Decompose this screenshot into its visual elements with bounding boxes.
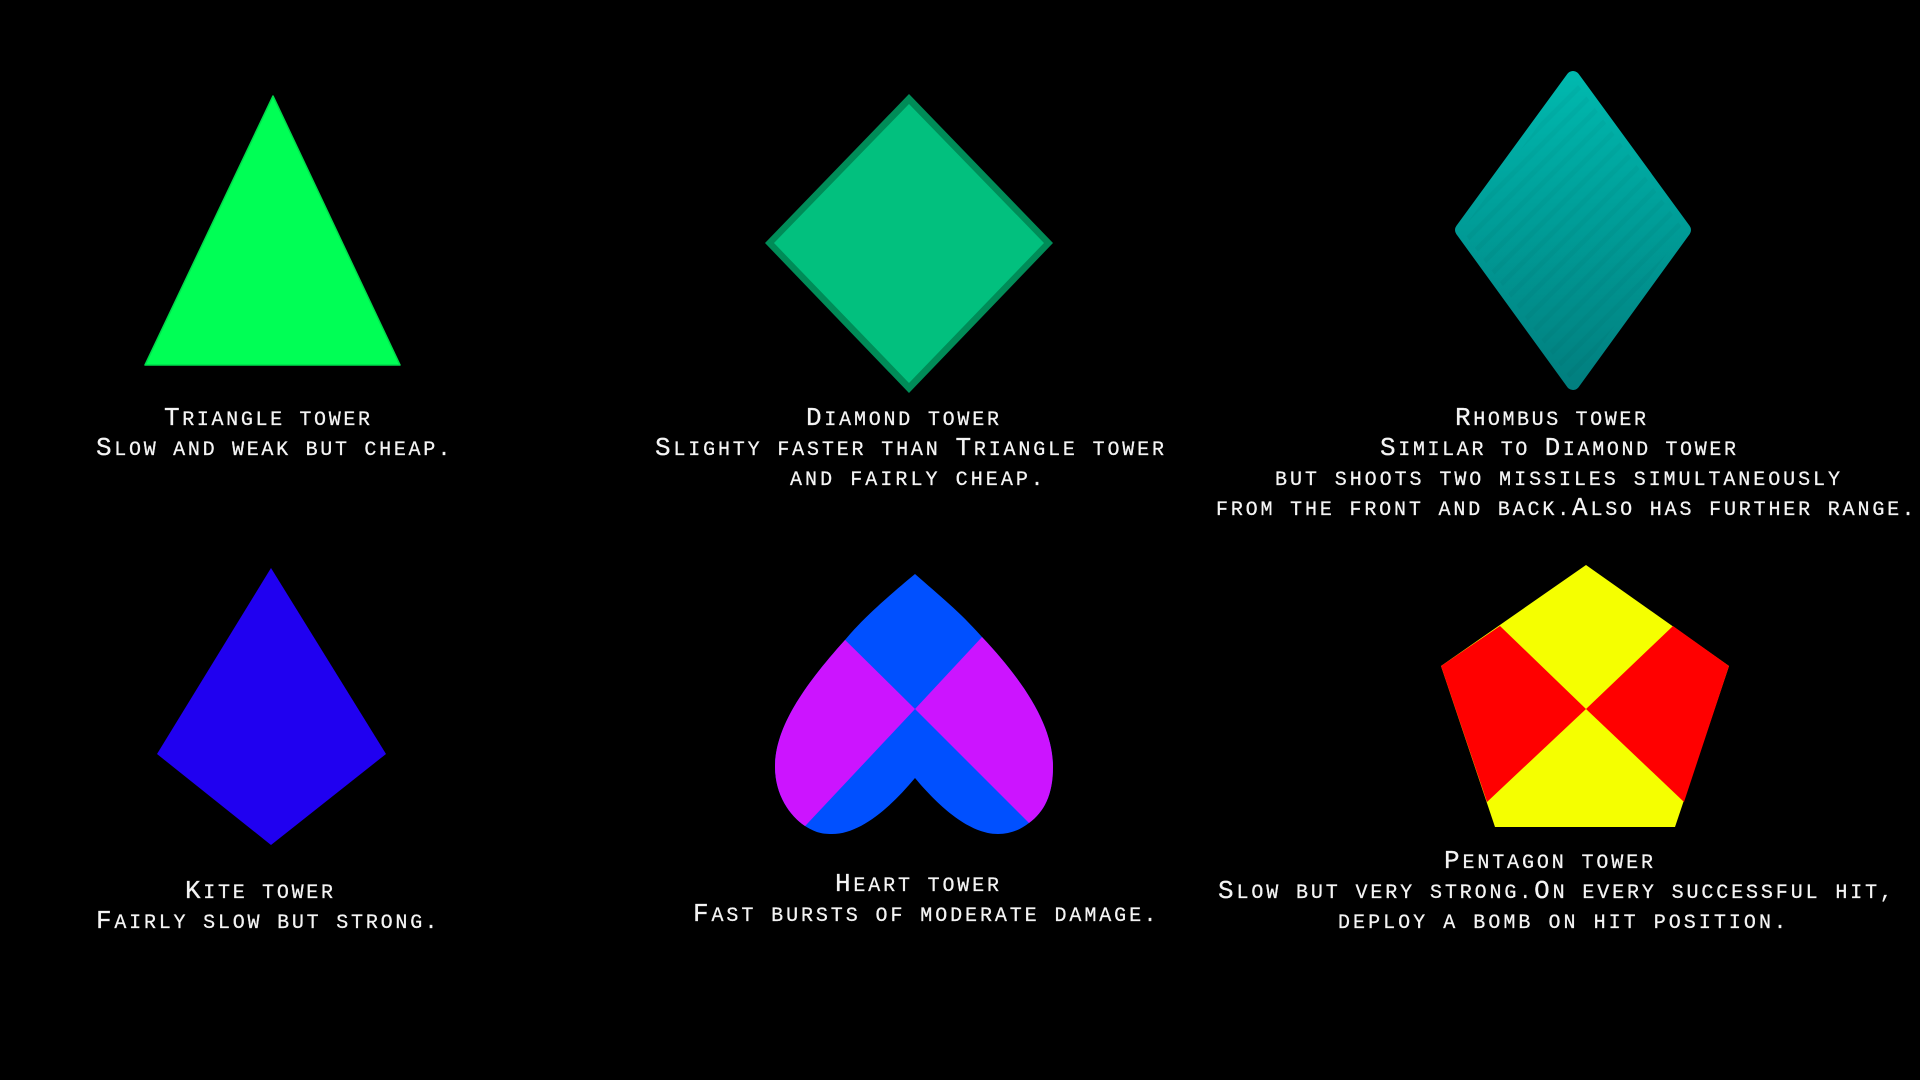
panel: triangle tower: [96, 96, 450, 463]
text: rhombus tower description: FROM THE FRONT AND BACK.ALSO HAS FURTHER RANGE.: [1216, 493, 1914, 523]
text: pentagon tower description: SLOW BUT VERY STRONG.ON EVERY SUCCESSFUL HIT,: [1218, 876, 1892, 906]
text: pentagon tower description: PENTAGON TOWER: [1444, 846, 1653, 876]
icon: heart: [775, 574, 1053, 834]
icon: pentagon: [1441, 565, 1729, 827]
icon: diamond: [765, 94, 1053, 393]
panel: rhombus tower: [1216, 78, 1914, 523]
icon: rhombus: [1462, 78, 1684, 383]
text: diamond tower description: [655, 403, 1164, 492]
text: kite tower description: KITE TOWER: [185, 876, 333, 906]
text: rhombus tower description: RHOMBUS TOWER: [1455, 403, 1646, 433]
text: kite tower description: FAIRLY SLOW BUT STRONG.: [96, 906, 437, 936]
panel: diamond tower: [655, 94, 1164, 492]
icon: kite: [157, 568, 386, 845]
text: heart tower description: HEART TOWER: [835, 869, 999, 899]
text: triangle tower description: TRIANGLE TOWER: [164, 403, 370, 433]
panel: kite tower: [96, 568, 437, 936]
icon: triangle: [145, 96, 400, 365]
text: heart tower description: FAST BURSTS OF MODERATE DAMAGE.: [693, 899, 1156, 929]
text: rhombus tower description: SIMILAR TO DIAMOND TOWER: [1380, 433, 1736, 463]
text: diamond tower description: AND FAIRLY CHEAP.: [790, 469, 1043, 492]
text: kite tower description: [96, 876, 437, 936]
text: diamond tower description: SLIGHTY FASTER THAN TRIANGLE TOWER: [655, 433, 1164, 463]
text: triangle tower description: [96, 403, 450, 463]
text: diamond tower description: DIAMOND TOWER: [806, 403, 999, 433]
panel: heart tower: [695, 574, 1152, 922]
text: pentagon tower description: DEPLOY A BOMB ON HIT POSITION.: [1338, 912, 1786, 935]
text: rhombus tower description: BUT SHOOTS TWO MISSILES SIMULTANEOUSLY: [1275, 469, 1840, 492]
panel: pentagon tower: [1218, 565, 1892, 935]
text: triangle tower description: SLOW AND WEAK BUT CHEAP.: [96, 433, 450, 463]
text: rhombus tower description: [1216, 403, 1914, 523]
text: pentagon tower description: [1218, 846, 1892, 935]
text: heart tower description: [693, 869, 1156, 929]
